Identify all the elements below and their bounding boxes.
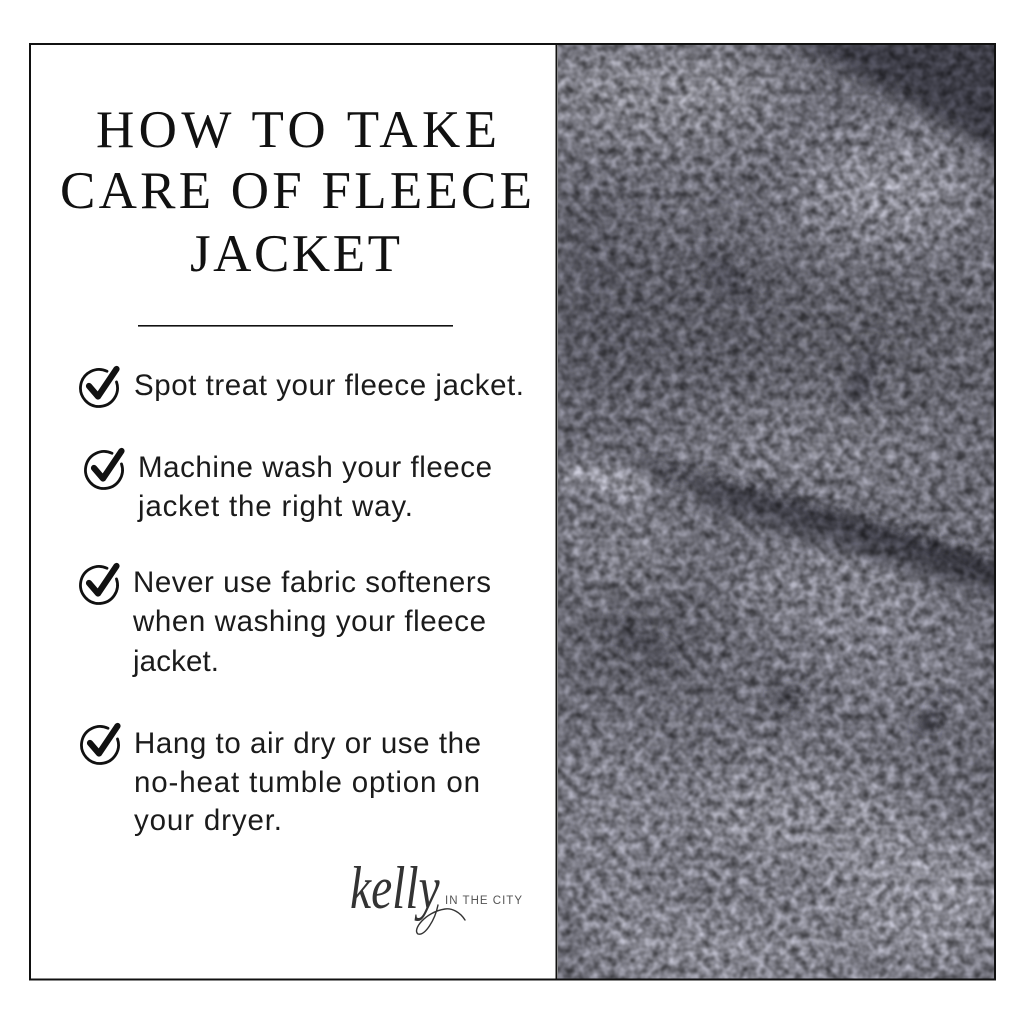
text: item 3: Never use fabric softeners [133, 566, 491, 599]
icon: check 4 [81, 726, 118, 763]
text: item 2: jacket the right way. [137, 490, 413, 523]
list item 1 [80, 369, 524, 406]
text: item 3 [132, 566, 491, 678]
text: item 2: Machine wash your fleece [138, 451, 492, 484]
text: item 4 [134, 727, 481, 837]
panel: fleece photo [558, 45, 994, 978]
text: item 3: when washing your fleece [132, 605, 486, 638]
icon: check 2 [85, 451, 122, 488]
text: item 1: Spot treat your fleece jacket. [134, 369, 524, 402]
text: item 2 [137, 451, 492, 523]
list item 3 [80, 566, 491, 678]
list item 2 [85, 451, 492, 523]
text: item 4: no-heat tumble option on [134, 766, 480, 799]
title: CARE OF FLEECE [60, 162, 532, 220]
title [60, 101, 532, 283]
text: item 4: Hang to air dry or use the [134, 727, 481, 760]
icon: check 1 [80, 369, 117, 406]
title: HOW TO TAKE [96, 101, 497, 159]
text: item 4: your dryer. [134, 804, 282, 837]
text: item 3: jacket. [132, 645, 219, 678]
title: JACKET [190, 225, 400, 283]
logo: kelly in the city [350, 855, 522, 934]
logo: kelly in the city: kelly [350, 855, 441, 921]
list item 4 [81, 726, 481, 837]
icon: check 3 [80, 566, 117, 603]
divider rule [138, 325, 453, 327]
logo: kelly in the city: IN THE CITY [445, 895, 522, 907]
